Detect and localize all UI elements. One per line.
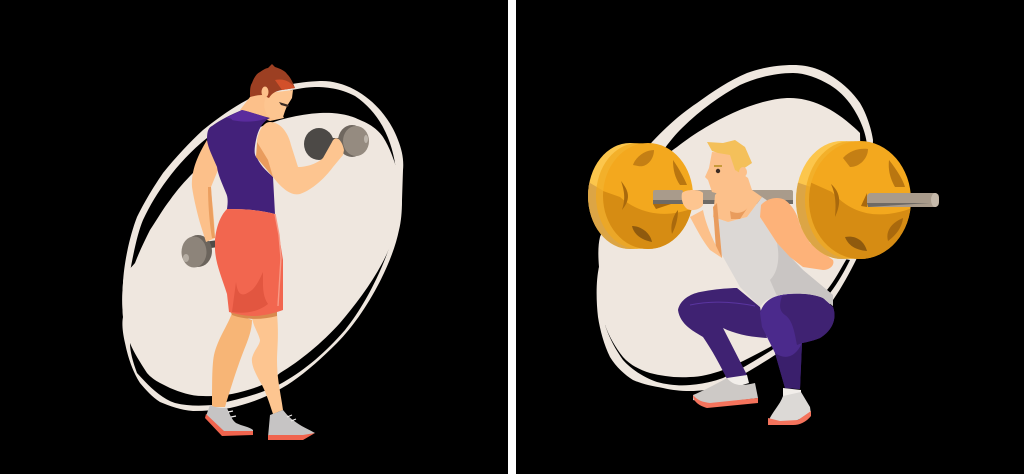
icon: lower dumbbell xyxy=(182,235,217,268)
face xyxy=(264,90,293,119)
barbell bar left section xyxy=(653,190,793,204)
icon: front shoe xyxy=(268,410,315,440)
panel: bottom white edge xyxy=(0,474,1024,475)
panel: left background xyxy=(0,0,508,474)
bent arm xyxy=(257,122,344,194)
hair xyxy=(250,64,295,98)
panel: left blob backdrop xyxy=(122,81,403,411)
icon: right barbell plate xyxy=(796,141,911,259)
hair xyxy=(707,140,752,173)
shorts xyxy=(215,209,283,316)
icon: left barbell plate xyxy=(588,143,693,249)
hanging arm xyxy=(192,140,218,242)
neck xyxy=(240,90,284,121)
shorts hem shadow xyxy=(230,310,277,319)
sock back xyxy=(727,375,749,388)
ear and eye xyxy=(714,165,747,177)
near arm xyxy=(760,198,833,270)
panel: right blob backdrop xyxy=(597,65,873,391)
tank top xyxy=(207,110,275,214)
figure: man curling dumbbells xyxy=(182,64,369,440)
face xyxy=(705,152,737,195)
tank top xyxy=(713,197,833,307)
icon: back shoe xyxy=(693,378,758,408)
far arm xyxy=(690,210,722,258)
back leg xyxy=(212,313,252,407)
icon: back shoe xyxy=(205,405,253,436)
icon: upper dumbbell xyxy=(304,125,369,160)
ear and eye xyxy=(262,86,289,107)
neck and chest xyxy=(713,170,762,222)
front leg xyxy=(760,294,834,389)
icon: hand on bar xyxy=(682,190,703,210)
sock front xyxy=(783,388,801,399)
figure: man squatting with barbell xyxy=(585,140,939,425)
back leg xyxy=(678,288,767,379)
panel: right background xyxy=(516,0,1024,474)
front leg xyxy=(252,314,283,414)
icon: front shoe xyxy=(768,392,811,425)
barbell bar right section xyxy=(861,193,939,207)
